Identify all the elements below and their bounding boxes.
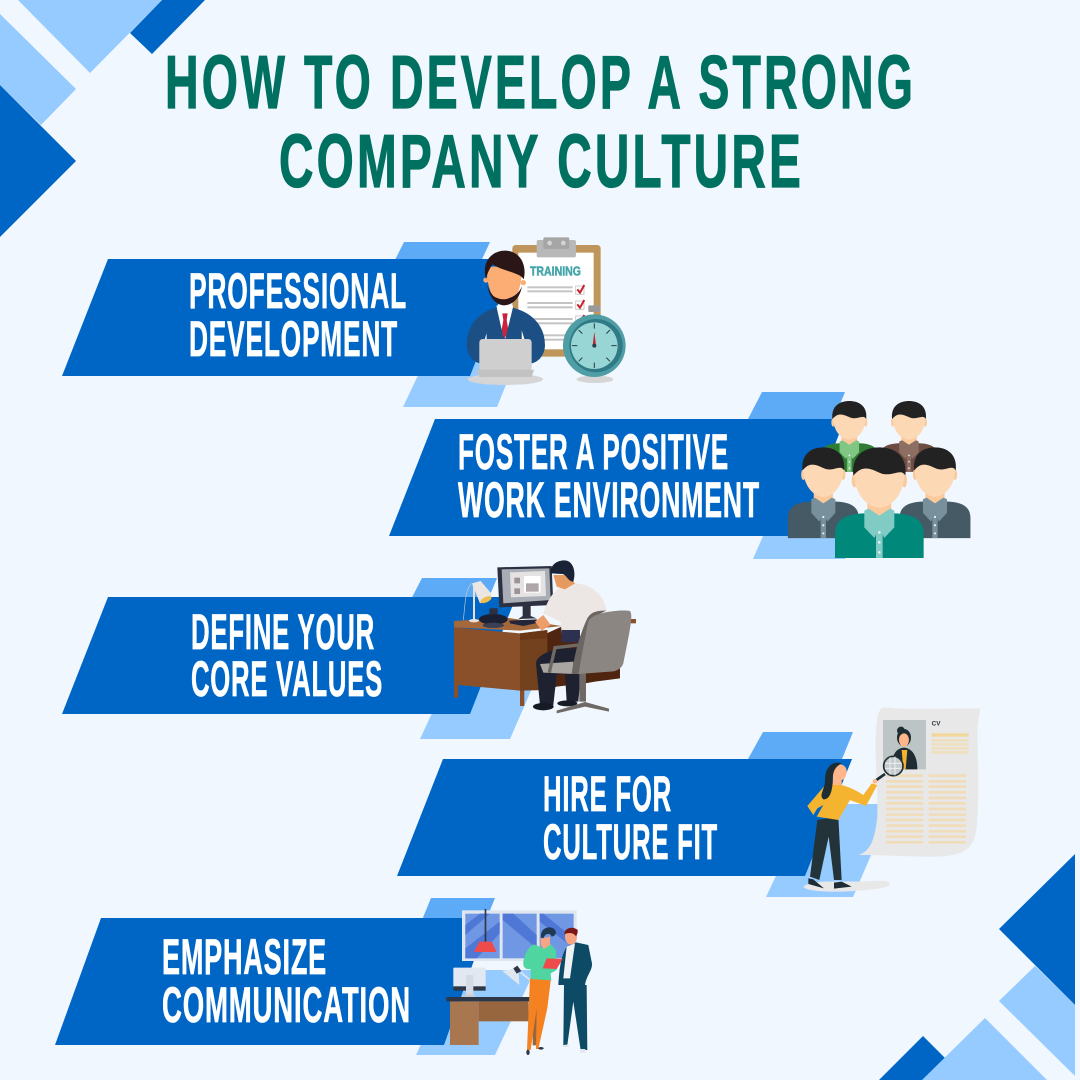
heading: define your core values: DEFINE YOUR — [191, 604, 375, 660]
heading: foster a positive work environment: FOSTER A POSITIVE — [458, 424, 729, 480]
icon: woman inspecting a CV — [803, 707, 981, 892]
title — [165, 40, 916, 203]
heading: professional development: PROFESSIONAL — [189, 263, 407, 319]
heading: hire for culture fit: CULTURE FIT — [543, 814, 718, 870]
heading: emphasize communication: COMMUNICATION — [162, 977, 411, 1033]
heading: emphasize communication: EMPHASIZE — [162, 929, 327, 985]
decoration: top left shapes — [0, 0, 205, 237]
heading: foster a positive work environment — [458, 424, 760, 528]
decoration: bottom right shapes — [879, 854, 1075, 1080]
icon: two colleagues in an office — [446, 909, 592, 1055]
heading: define your core values — [191, 604, 383, 707]
panel: hire for culture fit — [397, 707, 981, 897]
icon: trainer with clipboard and stopwatch: TRAINING — [530, 264, 581, 279]
panel: emphasize communication — [55, 898, 592, 1055]
icon: man working at a desk — [454, 560, 636, 713]
heading: emphasize communication — [162, 929, 411, 1033]
heading: professional development: DEVELOPMENT — [189, 311, 398, 367]
heading: foster a positive work environment: WORK ENVIRONMENT — [458, 472, 760, 528]
icon: team of five people — [788, 401, 970, 558]
heading: define your core values: CORE VALUES — [191, 651, 383, 707]
panel: foster a positive work environment — [389, 392, 970, 559]
heading: hire for culture fit: HIRE FOR — [543, 766, 672, 822]
heading: professional development — [189, 263, 407, 367]
title: COMPANY CULTURE — [279, 119, 804, 203]
heading: hire for culture fit — [543, 766, 718, 870]
icon: woman inspecting a CV: CV — [932, 721, 941, 728]
icon: trainer with clipboard and stopwatch — [467, 237, 626, 385]
panel: professional development — [62, 237, 626, 407]
panel: define your core values — [62, 560, 636, 739]
